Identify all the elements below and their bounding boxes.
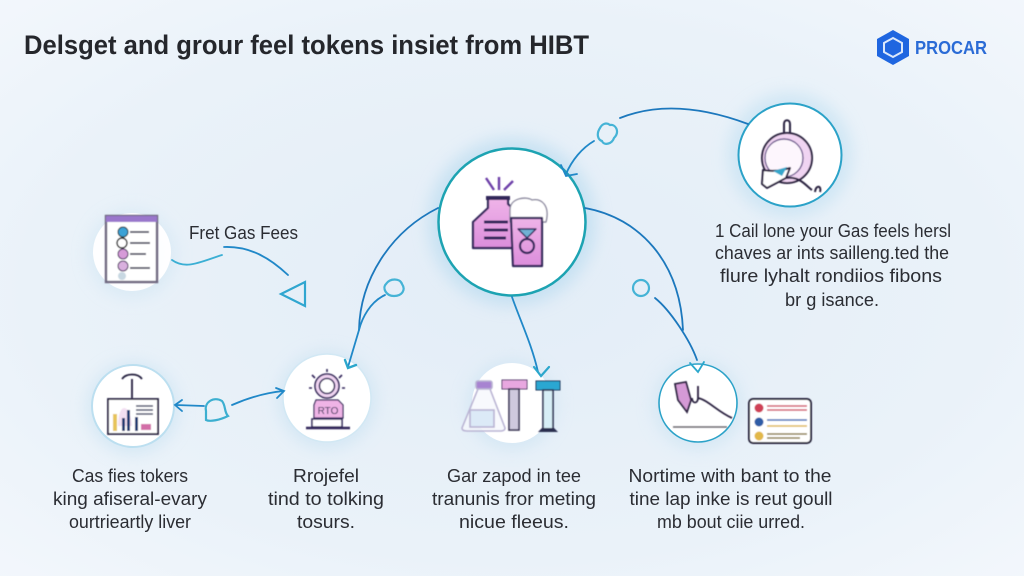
icon: hand tool [673,382,732,427]
icon: test tube blue [536,381,560,432]
icon: colour legend card [749,399,811,443]
text block: bottom left caption [53,465,208,532]
text block: second caption [268,465,384,532]
title: Delsget and grour feel tokens insiet from HIBT [24,30,589,60]
icon: test tube pink [502,380,527,430]
text block: third caption: nicue fleeus. [459,511,569,532]
icon: gas bottle and token can [473,177,547,266]
text block: fourth caption: tine lap inke is reut goull [630,488,832,509]
icon: flask [462,381,505,431]
heading: Fret Gas Fees: Fret Gas Fees [189,223,298,243]
panel: top right node [728,93,852,217]
text block: third caption: Gar zapod in tee [447,465,581,486]
text block: bottom left caption: Cas fies tokers [72,465,188,486]
panel: central node [428,138,596,306]
icon: chart board with antenna [108,374,158,434]
text block: bottom left caption: king afiseral-evary [53,488,208,509]
text block: second caption: Rrojefel [293,465,359,486]
logo: PROCAR [877,30,987,65]
text block: third caption: tranunis fror meting [432,488,596,509]
text block: fourth caption: mb bout ciie urred. [657,511,805,532]
text block: right description: flure lyhalt rondiios fibons [720,265,942,286]
icon: checklist document [106,216,157,282]
panel: second bottom node [278,351,376,449]
panel: gas fees checklist node [88,210,176,298]
icon: round flask with hand [762,120,820,192]
icon: lamp on pedestal: RTO [318,406,339,417]
text block: second caption: tind to tolking [268,488,384,509]
panel: bottom left node [87,362,179,454]
text block: right description [715,220,951,310]
text block: fourth caption [628,465,832,532]
connector arrows [172,109,748,421]
text block: second caption: tosurs. [297,511,355,532]
text block: fourth caption: Nortime with bant to the [628,465,832,486]
logo: PROCAR: PROCAR [915,37,987,58]
text block: right description: br g isance. [785,289,879,310]
panel: flask and tubes node [462,360,557,450]
panel: right bottom node [653,360,743,450]
text block: right description: chaves ar ints sailleng.ted the [715,242,949,263]
text block: bottom left caption: ourtrieartly liver [69,511,191,532]
text block: third caption [432,465,596,532]
text block: right description: 1 Cail lone your Gas feels hersl [715,220,951,241]
